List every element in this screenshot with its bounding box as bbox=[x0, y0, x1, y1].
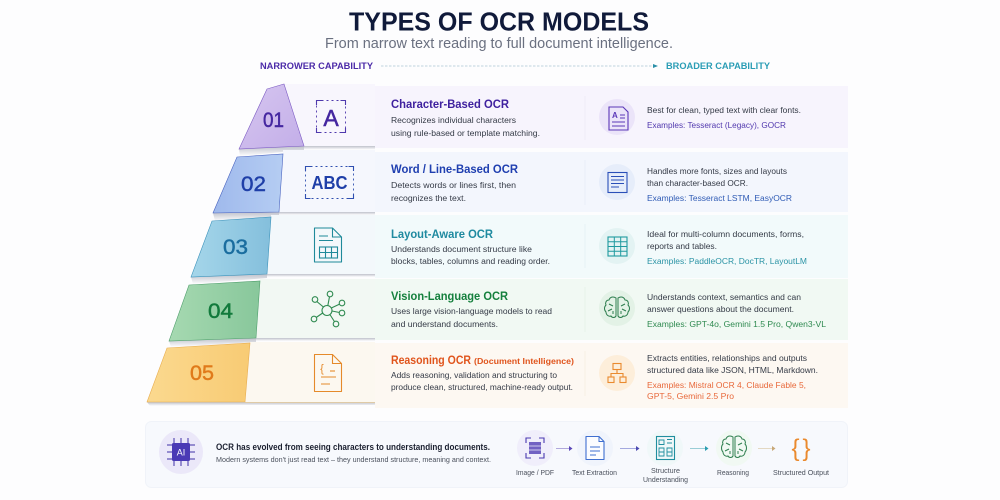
flow step: structured output bbox=[773, 435, 829, 477]
subtitle: From narrow text reading to full document intelligence. bbox=[325, 36, 673, 52]
row 3 use case: reports and tables. bbox=[647, 241, 717, 251]
row 1 use case bbox=[647, 105, 801, 130]
flow step: structured output: { } bbox=[792, 435, 810, 462]
row 2 use case: Handles more fonts, sizes and layouts bbox=[647, 166, 787, 176]
row 5 icon: hierarchy bbox=[599, 355, 635, 391]
row 5 title: Reasoning OCR bbox=[391, 353, 471, 367]
row 4 title: Vision-Language OCR bbox=[391, 289, 508, 303]
panel: row 5 details bbox=[375, 343, 848, 408]
row 2 use case: than character-based OCR. bbox=[647, 178, 748, 188]
arrow bbox=[620, 446, 640, 451]
row 5 title bbox=[391, 353, 574, 367]
row 2 description: Detects words or lines first, then bbox=[391, 180, 516, 190]
row 5 use case: GPT-5, Gemini 2.5 Pro bbox=[647, 391, 734, 401]
panel: summary strip bbox=[146, 422, 848, 488]
icon: network bbox=[311, 291, 345, 327]
row 2 use case bbox=[647, 166, 792, 203]
row 5 description: Adds reasoning, validation and structuring to bbox=[391, 370, 557, 380]
row 4 use case bbox=[647, 292, 826, 329]
row 1 use case: Best for clean, typed text with clear fonts. bbox=[647, 105, 801, 115]
row 4 description bbox=[391, 306, 552, 329]
pyramid tier 5 bbox=[147, 342, 375, 406]
flow step: reasoning: Reasoning bbox=[717, 468, 749, 477]
icon: ABC bbox=[306, 166, 354, 198]
panel: row 2 details bbox=[375, 152, 848, 212]
row 1 description bbox=[391, 115, 540, 138]
flow step: image / PDF: Image / PDF bbox=[516, 468, 554, 477]
icon: AI chip bbox=[159, 430, 203, 474]
row 3 title: Layout-Aware OCR bbox=[391, 227, 493, 241]
flow step: structure understanding: Structure bbox=[651, 466, 680, 475]
summary text: OCR has evolved from seeing characters to understanding documents. bbox=[216, 442, 490, 452]
row 2 description bbox=[391, 180, 516, 203]
pyramid tier 1 bbox=[239, 84, 375, 156]
row 5 description: produce clean, structured, machine-ready output. bbox=[391, 382, 573, 392]
row 4 description: Uses large vision-language models to read bbox=[391, 306, 552, 316]
icon: table document bbox=[314, 228, 342, 262]
icon: code document bbox=[314, 354, 342, 392]
panel: row 3 details bbox=[375, 215, 848, 278]
flow step: text extraction: Text Extraction bbox=[572, 468, 617, 477]
arrow bbox=[556, 446, 572, 451]
tier number 04: 04 bbox=[208, 300, 233, 323]
flow step: reasoning bbox=[716, 430, 752, 477]
capability axis bbox=[260, 61, 770, 71]
row 1 icon: document: A bbox=[612, 111, 618, 120]
flow step: structure understanding bbox=[643, 430, 688, 484]
capability axis: BROADER CAPABILITY bbox=[666, 61, 770, 71]
arrow bbox=[758, 446, 776, 451]
row 2 icon: text page bbox=[599, 164, 635, 200]
row 1 icon: document bbox=[599, 99, 635, 135]
flow step: structure understanding: Understanding bbox=[643, 475, 688, 484]
row 1 description: Recognizes individual characters bbox=[391, 115, 516, 125]
summary text: Modern systems don't just read text – they understand structure, meaning and context. bbox=[216, 455, 491, 464]
flow step: text extraction bbox=[572, 430, 617, 477]
row 3 description: blocks, tables, columns and reading order. bbox=[391, 256, 550, 266]
row 5 use case: Examples: Mistral OCR 4, Claude Fable 5, bbox=[647, 380, 806, 390]
row 4 description: and understand documents. bbox=[391, 319, 498, 329]
icon: letter A: A bbox=[323, 105, 339, 131]
row 4 use case: Examples: GPT-4o, Gemini 1.5 Pro, Qwen3-VL bbox=[647, 319, 826, 329]
row 3 use case: Examples: PaddleOCR, DocTR, LayoutLM bbox=[647, 256, 807, 266]
flow step: structured output: Structured Output bbox=[773, 468, 829, 477]
row 3 icon: table bbox=[599, 228, 635, 264]
row 2 use case: Examples: Tesseract LSTM, EasyOCR bbox=[647, 193, 792, 203]
pyramid tier 4 bbox=[169, 279, 375, 347]
row 4 use case: Understands context, semantics and can bbox=[647, 292, 801, 302]
icon: AI chip: AI bbox=[177, 448, 185, 458]
row 5 use case: structured data like JSON, HTML, Markdown. bbox=[647, 365, 818, 375]
row 3 use case: Ideal for multi-column documents, forms, bbox=[647, 229, 804, 239]
row 3 description: Understands document structure like bbox=[391, 244, 532, 254]
row 1 title: Character-Based OCR bbox=[391, 97, 509, 111]
row 4 use case: answer questions about the document. bbox=[647, 304, 794, 314]
icon: code document: { bbox=[320, 363, 324, 375]
tier number 05: 05 bbox=[190, 362, 214, 385]
panel: row 4 details bbox=[375, 279, 848, 340]
row 1 description: using rule-based or template matching. bbox=[391, 128, 540, 138]
pyramid tier 2 bbox=[213, 150, 375, 221]
row 2 description: recognizes the text. bbox=[391, 193, 466, 203]
arrow bbox=[690, 446, 708, 451]
icon: ABC: ABC bbox=[312, 172, 348, 193]
row 3 use case bbox=[647, 229, 807, 266]
row 5 use case bbox=[647, 353, 818, 401]
tier number 02: 02 bbox=[241, 173, 266, 196]
row 5 use case: Extracts entities, relationships and outputs bbox=[647, 353, 807, 363]
row 5 description bbox=[391, 370, 573, 392]
row 2 title: Word / Line-Based OCR bbox=[391, 162, 518, 176]
pyramid tier 3 bbox=[191, 215, 375, 284]
row 1 use case: Examples: Tesseract (Legacy), GOCR bbox=[647, 120, 786, 130]
capability axis: NARROWER CAPABILITY bbox=[260, 61, 373, 71]
tier number 03: 03 bbox=[223, 236, 248, 259]
title: TYPES OF OCR MODELS bbox=[349, 8, 649, 36]
tier number 01: 01 bbox=[263, 109, 284, 132]
row 4 icon: brain bbox=[599, 290, 635, 326]
flow step: image / PDF bbox=[516, 430, 554, 477]
panel: row 1 details bbox=[375, 86, 848, 148]
summary text bbox=[216, 442, 491, 464]
row 3 description bbox=[391, 244, 550, 266]
row 5 title: (Document Intelligence) bbox=[474, 356, 574, 366]
